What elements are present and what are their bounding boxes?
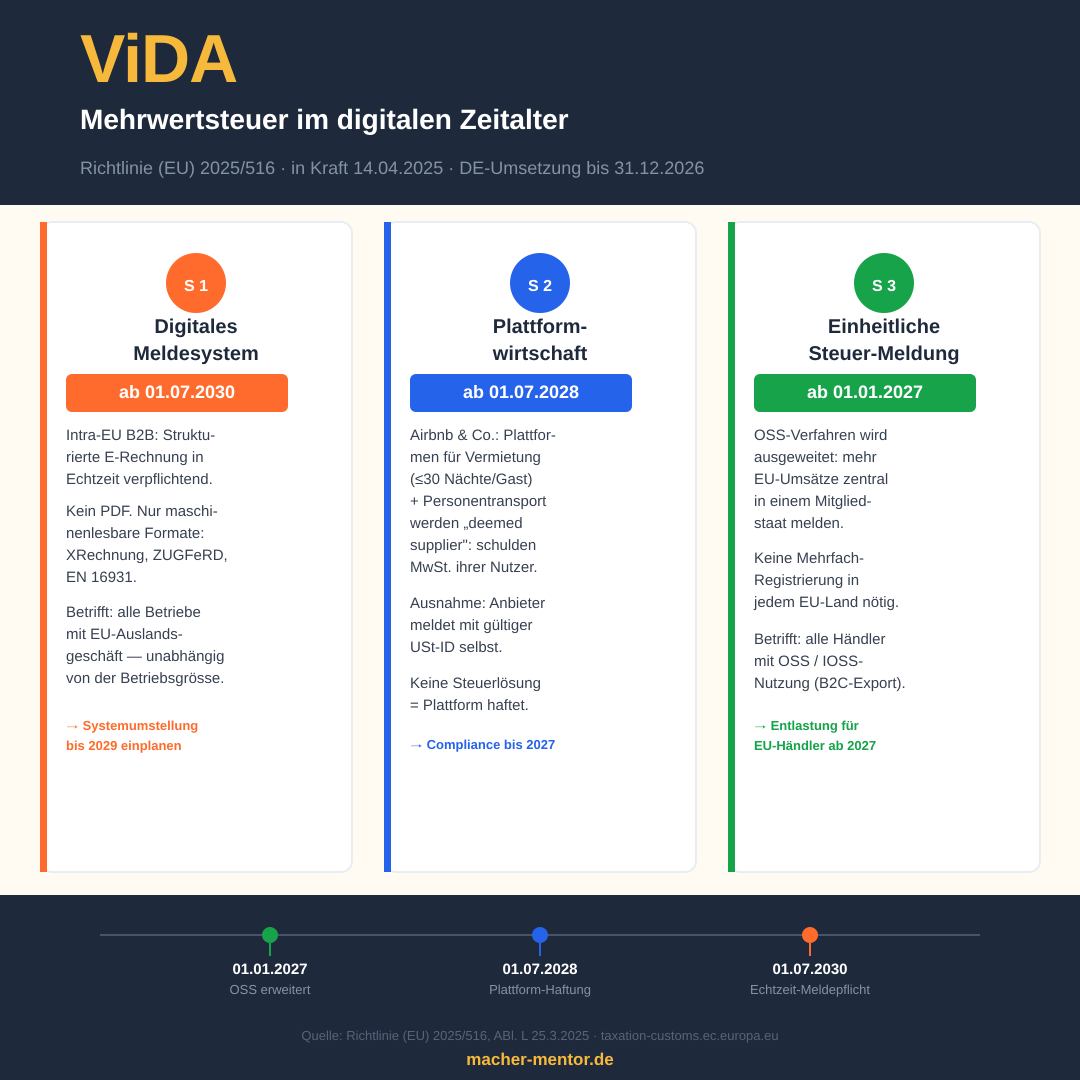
text S3 paragraph 3: Betrifft: alle Händler xyxy=(754,631,885,648)
timeline xyxy=(100,927,980,997)
text S3 paragraph 1: ausgeweitet: mehr xyxy=(754,449,877,466)
panel: S3 Einheitliche Steuer-Meldung xyxy=(728,221,1041,873)
heading S1: Digitales xyxy=(154,316,238,338)
date pill S1: ab 01.07.2030 xyxy=(119,382,235,402)
text S2 paragraph 3: Keine Steuerlösung xyxy=(410,675,541,692)
text S2 paragraph 1: (≤30 Nächte/Gast) xyxy=(410,471,532,488)
text S1 paragraph 1: Echtzeit verpflichtend. xyxy=(66,471,213,488)
text S2 paragraph 1: supplier": schulden xyxy=(410,537,536,554)
badge S3: S 3 xyxy=(872,278,896,295)
text S3 paragraph 1: in einem Mitglied- xyxy=(754,493,872,510)
date pill S3 xyxy=(754,374,976,412)
text S1 paragraph 1 xyxy=(66,427,215,488)
text S3 paragraph 2: Registrierung in xyxy=(754,572,859,589)
milestone 2027: 01.01.2027 xyxy=(232,961,308,978)
text S2 paragraph 2 xyxy=(410,595,545,656)
text S3 paragraph 2: Keine Mehrfach- xyxy=(754,550,864,567)
text S2 paragraph 1 xyxy=(410,427,556,576)
date pill S2 xyxy=(410,374,632,412)
text S1 paragraph 2: EN 16931. xyxy=(66,569,137,586)
heading S3 xyxy=(808,316,960,365)
text S2 paragraph 3: = Plattform haftet. xyxy=(410,697,529,714)
badge S2 xyxy=(510,253,570,313)
heading S3: Steuer-Meldung xyxy=(808,343,960,365)
text S2 paragraph 1: MwSt. ihrer Nutzer. xyxy=(410,559,538,576)
text S2 paragraph 1: Airbnb & Co.: Plattfor- xyxy=(410,427,556,444)
heading S2: wirtschaft xyxy=(493,343,587,365)
callout S3: EU-Händler ab 2027 xyxy=(754,738,876,753)
source line: Quelle: Richtlinie (EU) 2025/516, ABl. L 25.3.2025 · taxation-customs.ec.europa.eu xyxy=(301,1028,779,1043)
text S1 paragraph 1: Intra-EU B2B: Struktu- xyxy=(66,427,215,444)
callout S1 xyxy=(64,717,198,753)
directive info line: Richtlinie (EU) 2025/516 · in Kraft 14.04.2025 · DE-Umsetzung bis 31.12.2026 xyxy=(80,158,704,178)
date pill S2: ab 01.07.2028 xyxy=(463,382,579,402)
text S2 paragraph 2: Ausnahme: Anbieter xyxy=(410,595,545,612)
brand: macher-mentor.de xyxy=(466,1050,614,1069)
text S1 paragraph 2: XRechnung, ZUGFeRD, xyxy=(66,547,228,564)
text S1 paragraph 3: mit EU-Auslands- xyxy=(66,626,183,643)
heading S2: Plattform- xyxy=(493,316,587,338)
callout S3 xyxy=(752,717,876,753)
callout S3: Entlastung für xyxy=(771,718,859,733)
text S1 paragraph 3: geschäft — unabhängig xyxy=(66,648,224,665)
milestone 2030 xyxy=(750,927,870,997)
text S2 paragraph 3 xyxy=(410,675,541,714)
text S3 paragraph 1 xyxy=(754,427,888,532)
milestone 2028: 01.07.2028 xyxy=(502,961,578,978)
text S2 paragraph 2: USt-ID selbst. xyxy=(410,639,503,656)
subtitle: Mehrwertsteuer im digitalen Zeitalter xyxy=(80,104,569,135)
text S2 paragraph 1: + Personentransport xyxy=(410,493,546,510)
date pill S3: ab 01.01.2027 xyxy=(807,382,923,402)
callout S3: → xyxy=(752,717,769,732)
text S1 paragraph 2: Kein PDF. Nur maschi- xyxy=(66,503,218,520)
heading S2 xyxy=(492,316,588,365)
text S1 paragraph 3: Betrifft: alle Betriebe xyxy=(66,604,201,621)
text S2 paragraph 1: werden „deemed xyxy=(410,515,523,532)
callout S1: bis 2029 einplanen xyxy=(66,738,182,753)
footer band xyxy=(0,895,1080,1080)
callout S1: Systemumstellung xyxy=(83,718,198,733)
heading S3: Einheitliche xyxy=(828,316,940,338)
heading S1: Meldesystem xyxy=(133,343,259,365)
text S1 paragraph 2 xyxy=(66,503,228,586)
text S3 paragraph 2 xyxy=(754,550,899,611)
text S3 paragraph 3: mit OSS / IOSS- xyxy=(754,653,863,670)
text S1 paragraph 3 xyxy=(66,604,224,687)
badge S1 xyxy=(166,253,226,313)
badge S1: S 1 xyxy=(184,278,208,295)
milestone 2027 xyxy=(230,927,310,997)
text S3 paragraph 1: OSS-Verfahren wird xyxy=(754,427,887,444)
text S3 paragraph 3 xyxy=(754,631,906,692)
milestone 2028 xyxy=(489,927,591,997)
text S3 paragraph 3: Nutzung (B2C-Export). xyxy=(754,675,906,692)
date pill S1 xyxy=(66,374,288,412)
milestone 2030: 01.07.2030 xyxy=(772,961,848,978)
text S2 paragraph 2: meldet mit gültiger xyxy=(410,617,533,634)
badge S2: S 2 xyxy=(528,278,552,295)
text S3 paragraph 1: EU-Umsätze zentral xyxy=(754,471,888,488)
badge S3 xyxy=(854,253,914,313)
text S1 paragraph 3: von der Betriebsgrösse. xyxy=(66,670,224,687)
callout S2: Compliance bis 2027 xyxy=(427,737,555,752)
milestone 2030: Echtzeit-Meldepflicht xyxy=(750,982,870,997)
milestone 2028: Plattform-Haftung xyxy=(489,982,591,997)
header band xyxy=(0,0,1080,205)
heading S1 xyxy=(133,316,259,365)
milestone 2027: OSS erweitert xyxy=(230,982,310,997)
text S3 paragraph 2: jedem EU-Land nötig. xyxy=(754,594,899,611)
text S2 paragraph 1: men für Vermietung xyxy=(410,449,541,466)
panel: S2 Plattformwirtschaft xyxy=(384,221,697,873)
title: ViDA xyxy=(80,21,237,97)
callout S2: → xyxy=(408,736,425,751)
text S1 paragraph 1: rierte E-Rechnung in xyxy=(66,449,204,466)
callout S1: → xyxy=(64,717,81,732)
panel: S1 Digitales Meldesystem xyxy=(40,221,353,873)
text S1 paragraph 2: nenlesbare Formate: xyxy=(66,525,204,542)
text S3 paragraph 1: staat melden. xyxy=(754,515,844,532)
